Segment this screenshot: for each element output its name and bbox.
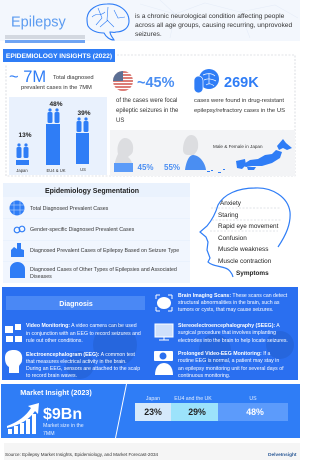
region labels bbox=[146, 396, 257, 402]
region labels: US bbox=[249, 396, 257, 402]
value: $9Bn bbox=[43, 406, 82, 423]
axis labels: Japan bbox=[16, 168, 28, 173]
brain imaging text: structural abnormalities in the brain, such as bbox=[178, 300, 280, 306]
bar chart bbox=[9, 97, 107, 175]
panel: male and female in Japan bbox=[110, 130, 295, 176]
video monitoring text: rule out other conditions. bbox=[26, 338, 83, 344]
row labels: Diseases bbox=[30, 274, 52, 280]
share bar: 48% bbox=[246, 407, 264, 417]
rows bbox=[3, 197, 190, 283]
SEEG text: surgical procedure that involves implanting bbox=[178, 330, 276, 336]
description: seizures. bbox=[135, 31, 162, 38]
share bar bbox=[135, 403, 288, 421]
prolonged EEG text: an epilepsy monitoring unit for several days of bbox=[178, 366, 284, 372]
stat: 7M: ~ 7M bbox=[9, 68, 46, 86]
values: 13% bbox=[18, 132, 32, 139]
share bar: 29% bbox=[188, 407, 206, 417]
head outline bbox=[200, 188, 290, 277]
panel: market insight bbox=[1, 384, 126, 438]
stat: 7M bbox=[9, 68, 94, 91]
values: 39% bbox=[77, 110, 91, 117]
bars bbox=[16, 124, 89, 165]
heading: Market Insight (2023) bbox=[20, 388, 92, 397]
stat: 269K: cases were found in drug-resistant bbox=[194, 98, 284, 104]
video monitoring text: in conjunction with an EEG to record seizures and bbox=[26, 331, 141, 337]
symptom list: Symptoms bbox=[236, 270, 269, 277]
row labels: Gender-specific Diagnosed Prevalent Cases bbox=[30, 227, 135, 233]
heading bbox=[6, 296, 145, 310]
icon: people bbox=[16, 108, 88, 158]
panel: diagnosis bbox=[2, 287, 298, 380]
symptom list: Anxiety bbox=[220, 200, 242, 207]
values: 48% bbox=[49, 101, 63, 108]
stat: 45% bbox=[116, 75, 179, 124]
EEG text: that measures electrical activity in the brain. bbox=[26, 359, 127, 365]
icon: US flag bbox=[113, 71, 133, 91]
icon: video monitoring bbox=[5, 324, 22, 342]
section heading: EPIDEMIOLOGY INSIGHTS (2022) bbox=[6, 53, 112, 60]
EEG text bbox=[26, 352, 140, 379]
video monitoring text: Video Monitoring: A video camera can be used bbox=[26, 323, 137, 329]
symptom list: Staring bbox=[218, 212, 239, 219]
symptom list: Muscle weakness bbox=[218, 246, 268, 253]
icons bbox=[10, 200, 25, 278]
title decoration bbox=[5, 35, 85, 43]
share bar: 23% bbox=[144, 407, 162, 417]
panel: epidemiology segmentation bbox=[3, 183, 190, 283]
caption: 7MM bbox=[43, 431, 55, 437]
caption: Market size in the bbox=[43, 423, 84, 429]
symptom list bbox=[218, 200, 279, 277]
stat: 45%: of the cases were focal bbox=[116, 98, 177, 104]
icon: brain bbox=[87, 4, 129, 40]
axis labels: EU4 & UK bbox=[46, 168, 66, 173]
stat: 7M: Total diagnosed bbox=[53, 75, 94, 81]
caption bbox=[43, 423, 84, 437]
region labels: Japan bbox=[146, 396, 160, 402]
stat: 45%: ~45% bbox=[137, 75, 175, 91]
icon: female bbox=[114, 138, 133, 172]
icon: EEG head bbox=[5, 350, 22, 373]
prolonged EEG text bbox=[178, 351, 284, 379]
video monitoring text bbox=[26, 323, 141, 344]
description: across all age groups, causing recurring, unprovoked bbox=[135, 22, 293, 29]
title: Epilepsy bbox=[11, 14, 67, 30]
row labels: Total Diagnosed Prevalent Cases bbox=[30, 206, 109, 212]
label: map title: Male & Female in Japan bbox=[213, 144, 263, 149]
SEEG text: electrodes into the brain to help locate seizures. bbox=[178, 338, 288, 344]
panel: market share bbox=[116, 384, 300, 438]
icon: prolonged EEG bbox=[154, 351, 173, 375]
prolonged EEG text: routine EEG is normal, a patient may stay in bbox=[178, 358, 279, 364]
label: 45%: 45% bbox=[138, 163, 154, 172]
icon: monitor bbox=[155, 324, 173, 340]
icon: pill and brain bbox=[194, 69, 219, 93]
stat: 45%: US bbox=[116, 118, 124, 124]
heading: Diagnosis bbox=[59, 301, 93, 308]
label: 55%: 55% bbox=[164, 163, 180, 172]
region labels: EU4 and the UK bbox=[174, 396, 212, 402]
axis labels bbox=[16, 167, 86, 173]
EEG text: Electroencephalogram (EEG): A common test bbox=[26, 352, 136, 358]
stat: 269K: 269K bbox=[224, 75, 259, 91]
EEG text: to record brain waves. bbox=[26, 373, 77, 379]
heading: Epidemiology Segmentation bbox=[45, 188, 139, 195]
row labels bbox=[30, 206, 179, 280]
symptom list: Rapid eye movement bbox=[218, 223, 279, 230]
symptom list: Confusion bbox=[218, 235, 247, 242]
stat: 269K: epilepsy/refractory cases in the US bbox=[194, 108, 285, 114]
EEG text: During an EEG, sensors are attached to the scalp bbox=[26, 366, 140, 372]
icon: growth arrow bbox=[7, 403, 39, 434]
footer bbox=[4, 443, 300, 460]
axis labels: US bbox=[80, 167, 86, 172]
icon: male bbox=[183, 135, 206, 170]
source: Source: Epilepsy Market Insights, Epidemiology, and Market Forecast-2034 bbox=[5, 452, 159, 457]
stat: 45%: epileptic seizures in the bbox=[116, 108, 179, 114]
icon: brain scan bbox=[156, 295, 172, 311]
brain imaging text: tumors or cysts, that may cause seizures. bbox=[178, 307, 273, 313]
description bbox=[135, 13, 293, 38]
stat: 7M: prevalent cases in the 7MM bbox=[21, 85, 92, 91]
values bbox=[18, 101, 91, 139]
symptom list: Muscle contraction bbox=[218, 258, 272, 265]
row labels: Diagnosed Prevalent Cases of Epilepsy Based on Seizure Type bbox=[30, 248, 179, 254]
SEEG text: Stereoelectroencephalography (SEEG): A bbox=[178, 323, 280, 329]
brain imaging text bbox=[178, 293, 288, 313]
prolonged EEG text: Prolonged Video-EEG Monitoring: If a bbox=[178, 351, 271, 357]
logo: DelveInsight bbox=[268, 452, 297, 458]
brain imaging text: Brain Imaging Scans: These scans can detect bbox=[178, 293, 288, 299]
symptoms bbox=[200, 188, 290, 277]
stat: 269K bbox=[194, 75, 285, 114]
description: is a chronic neurological condition affecting people bbox=[135, 13, 285, 20]
section heading bbox=[3, 49, 115, 62]
header bbox=[0, 0, 300, 43]
icon: map of Japan bbox=[207, 139, 292, 173]
SEEG text bbox=[178, 323, 288, 344]
row labels: Diagnosed Cases of Other Types of Epilepsies and Associated bbox=[30, 267, 177, 273]
prolonged EEG text: continuous monitoring. bbox=[178, 373, 230, 379]
